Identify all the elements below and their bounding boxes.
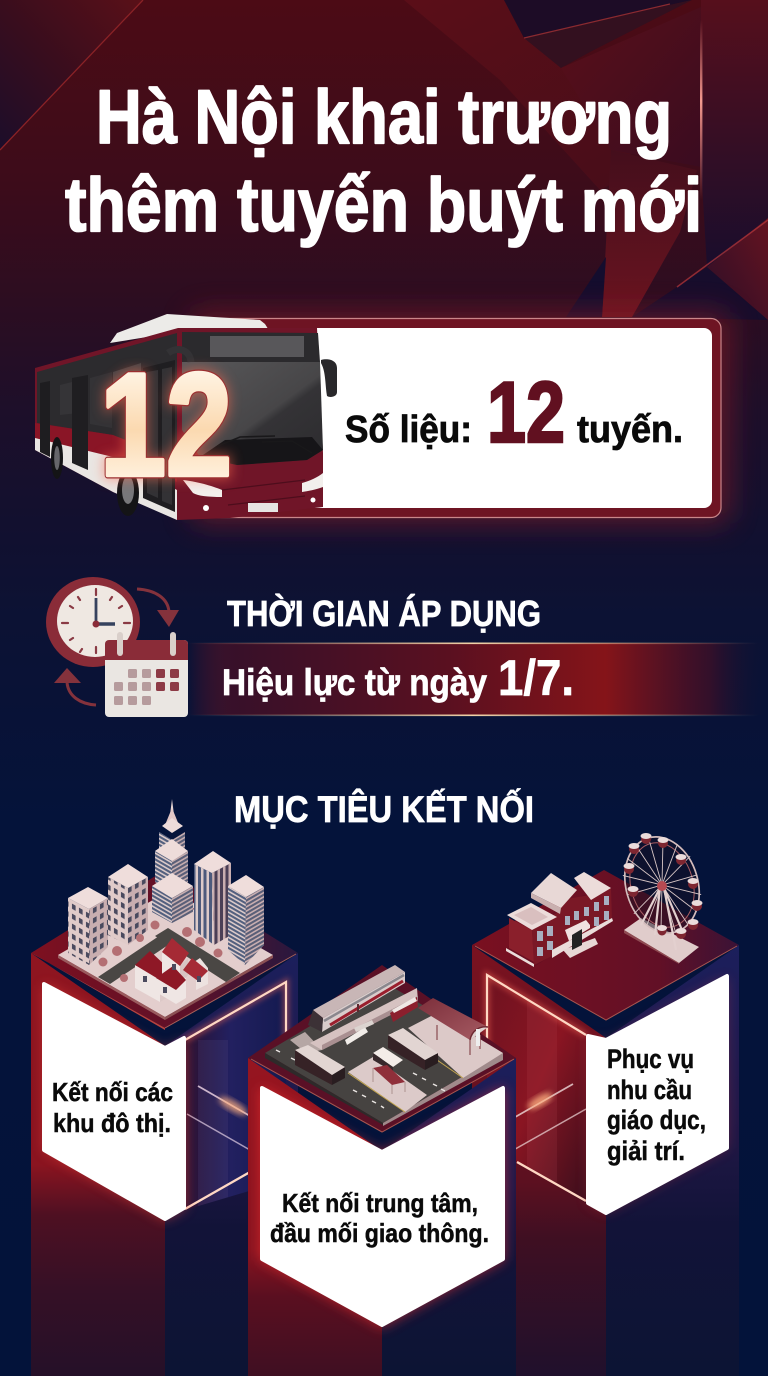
building: glass tower: [194, 851, 231, 945]
illustration: ferris wheel: [614, 828, 710, 964]
label card: education and entertainment: nhu cầu: [607, 1075, 692, 1105]
panel: transit hub column: [248, 965, 516, 1376]
label card: transit hub: đầu mối giao thông.: [270, 1218, 489, 1248]
road markings: [276, 1050, 445, 1108]
train: [308, 965, 405, 1032]
route count text: tuyến.: [577, 409, 683, 451]
icon: bus: [35, 314, 337, 520]
trees: [98, 920, 222, 982]
icon: cycle arrows: [54, 589, 179, 705]
panel: education and entertainment column: [472, 828, 739, 1376]
label card: transit hub: [260, 1086, 505, 1328]
number badge: 12: 12: [100, 343, 232, 506]
heading: application time: THỜI GIAN ÁP DỤNG: [227, 592, 541, 634]
route count text: [345, 365, 683, 461]
banner: effective date: 1/7.: [498, 650, 574, 706]
label card: urban areas: khu đô thị.: [53, 1108, 171, 1138]
icon: calendar: [105, 632, 188, 717]
icon: clock and calendar: [46, 577, 188, 717]
glass side panel: [487, 975, 586, 1203]
panel: route count: [190, 312, 730, 524]
title: [65, 75, 702, 248]
banner: effective date: Hiệu lực từ ngày: [222, 662, 487, 703]
label card: transit hub: Kết nối trung tâm,: [282, 1188, 478, 1218]
building: striped tower: [228, 875, 264, 965]
building: tower: [149, 799, 197, 930]
building: apartment left: [68, 887, 108, 965]
building: apartment back: [108, 864, 148, 945]
illustration: school: [506, 872, 613, 967]
label card: urban areas: [44, 984, 186, 1220]
title: Hà Nội khai trương: [96, 75, 672, 160]
label card: education and entertainment: giáo dục,: [607, 1105, 706, 1135]
heading: connection goals: MỤC TIÊU KẾT NỐI: [234, 788, 534, 830]
icon: clock: [46, 577, 140, 667]
number badge: 12: 12: [100, 343, 232, 506]
houses: [135, 938, 208, 1004]
panel: urban areas column: [31, 799, 739, 1376]
label card: education and entertainment: Phục vụ: [607, 1044, 694, 1074]
label card: education and entertainment: giải trí.: [607, 1136, 685, 1166]
banner: effective date: [188, 642, 768, 716]
route count text: 12: [487, 365, 565, 461]
route count text: Số liệu:: [345, 409, 472, 451]
number badge: 12: 12: [100, 343, 232, 506]
label card: education and entertainment: [588, 976, 727, 1213]
buses: [295, 997, 438, 1085]
illustration: city: [58, 799, 273, 1020]
illustration: transit hub: [265, 965, 503, 1126]
glass side panel: [185, 982, 286, 1220]
label card: urban areas: Kết nối các: [52, 1077, 173, 1107]
bus shelter: [373, 998, 488, 1094]
